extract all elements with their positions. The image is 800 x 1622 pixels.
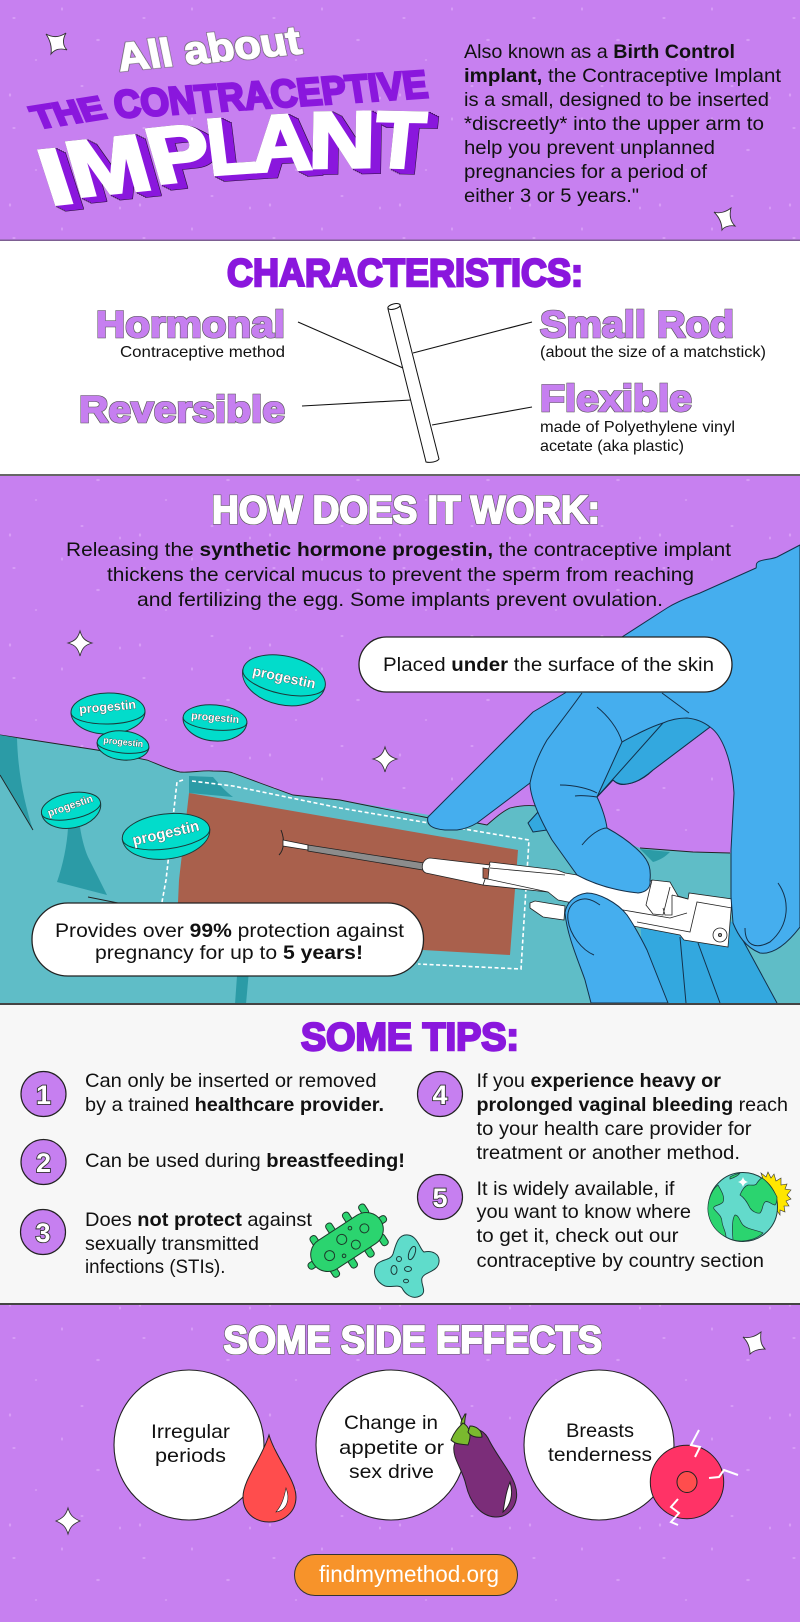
skin — [0, 735, 800, 1004]
callout: under the skin — [359, 637, 732, 692]
side effect: appetite or sex drive: Change in — [344, 1412, 438, 1434]
title: implant: A — [248, 97, 314, 189]
heading: characteristics: CHARACTERISTICS: — [227, 252, 583, 295]
explanation text — [66, 539, 732, 611]
title: the contraceptive — [25, 64, 431, 136]
intro text: Also known as a Birth Control — [464, 41, 735, 63]
intro text: implant, the Contraceptive Implant — [464, 65, 782, 87]
pill — [237, 648, 330, 713]
intro text: *discreetly* into the upper arm to — [464, 113, 764, 135]
label: flexible — [540, 378, 735, 455]
tip 5: It is widely available, if — [476, 1178, 675, 1200]
intro text: pregnancies for a period of — [464, 161, 708, 183]
intro text: help you prevent unplanned — [464, 137, 715, 159]
tip 3: infections (STIs). — [85, 1256, 226, 1278]
label: small rod: (about the size of a matchstick) — [540, 344, 766, 361]
pill: progestin — [131, 818, 201, 849]
title: implant: N — [308, 95, 376, 185]
icon: breast — [650, 1430, 738, 1525]
tip 2 — [21, 1140, 405, 1184]
tip 3 — [20, 1209, 313, 1278]
pill: progestin — [251, 663, 317, 692]
title: implant: I — [28, 133, 83, 222]
pill: progestin — [191, 710, 240, 726]
tip 5: 5 — [432, 1183, 448, 1213]
side effect: irregular periods: Irregular — [151, 1421, 231, 1443]
pill — [120, 809, 213, 864]
diagram: implant rod — [387, 302, 439, 462]
tip 4: prolonged vaginal bleeding reach — [476, 1094, 788, 1116]
callout: 99% protection: pregnancy for up to 5 years! — [95, 942, 363, 964]
dark lower fingers — [640, 915, 777, 1004]
side effect: breast tenderness — [524, 1370, 738, 1525]
icon: eggplant — [451, 1414, 517, 1517]
title: implant — [28, 94, 430, 222]
icon: globe with sun — [708, 1172, 791, 1242]
tip 1: by a trained healthcare provider. — [85, 1094, 384, 1116]
pill: progestin — [46, 793, 95, 819]
label: small rod: Small Rod — [540, 304, 734, 345]
label: hormonal — [96, 304, 285, 361]
panel: how does it work — [0, 476, 800, 1004]
tip 5 — [418, 1174, 764, 1272]
icon: sparkle top right — [714, 208, 735, 230]
intro text: either 3 or 5 years." — [464, 185, 639, 207]
icon: sparkle — [743, 1332, 765, 1354]
side effect: breast tenderness: tenderness — [548, 1444, 652, 1466]
icon: sparkle top left — [46, 33, 67, 54]
tip 2: Can be used during breastfeeding! — [85, 1150, 405, 1172]
panel: characteristics — [0, 241, 800, 476]
label: flexible: made of Polyethylene vinyl — [540, 419, 735, 436]
tip 4: treatment or another method. — [476, 1142, 740, 1164]
tip 2: 2 — [36, 1148, 51, 1178]
title: the contraceptive: THE — [25, 91, 111, 136]
intro text: is a small, designed to be inserted — [464, 89, 769, 111]
panel: header — [0, 0, 800, 242]
side effect: breast tenderness: Breasts — [566, 1420, 634, 1442]
heading: some side effects: SOME SIDE EFFECTS — [224, 1319, 602, 1362]
tip 1: 1 — [36, 1080, 51, 1110]
tip 4: If you experience heavy or — [476, 1070, 721, 1092]
skin shading — [0, 735, 670, 1004]
label: reversible: Reversible — [79, 389, 285, 430]
pill — [39, 788, 104, 833]
dashed sterile outline — [162, 780, 529, 969]
tip 4 — [418, 1070, 788, 1164]
pill: progestin — [79, 698, 137, 716]
side effect: appetite or sex drive: appetite or — [339, 1437, 445, 1459]
brown incision patch — [177, 793, 518, 955]
connector lines — [298, 322, 532, 425]
panel: some side effects — [0, 1305, 800, 1622]
callout: 99% protection: Provides over 99% protection against — [55, 920, 405, 942]
label: hormonal: Hormonal — [96, 304, 285, 345]
label: small rod — [540, 304, 766, 361]
icon: blood drop — [243, 1435, 296, 1522]
title: implant: P — [136, 108, 223, 201]
icon: green bacterium — [294, 1195, 400, 1289]
pill — [96, 728, 150, 763]
title: implant: T — [370, 94, 430, 185]
tip 3: Does not protect against — [85, 1209, 313, 1231]
callout: under the skin: Placed under the surface of the skin — [383, 654, 714, 676]
side effect: irregular periods: periods — [155, 1445, 226, 1467]
skin outline — [0, 735, 730, 853]
title: implant: L — [201, 100, 260, 192]
tip 4: to your health care provider for — [476, 1118, 752, 1140]
title: all about: All about — [113, 19, 305, 80]
title: the contraceptive: CONTRACEPTIVE — [111, 64, 431, 127]
progestin pills — [39, 648, 330, 864]
icon: sparkle — [373, 747, 397, 772]
tip 1 — [21, 1070, 384, 1116]
callout: 99% protection — [32, 903, 424, 976]
pill — [71, 692, 145, 735]
button: findmymethod.org: findmymethod.org — [319, 1561, 499, 1587]
explanation text: thickens the cervical mucus to prevent the sperm from reaching — [107, 564, 694, 586]
tip 3: sexually transmitted — [85, 1233, 259, 1255]
tip 4: 4 — [432, 1080, 448, 1110]
label: hormonal: Contraceptive method — [120, 344, 285, 361]
intro text — [464, 41, 782, 207]
side effect: irregular periods — [114, 1370, 296, 1522]
pill — [181, 702, 248, 744]
explanation text: Releasing the synthetic hormone progestin, the contraceptive implant — [66, 539, 732, 561]
tip 3: 3 — [35, 1218, 51, 1248]
title: implant: M — [56, 119, 161, 214]
icon: teal amoeba — [375, 1235, 439, 1297]
side effect: appetite or sex drive — [316, 1370, 517, 1520]
icon: sparkle — [56, 1508, 80, 1534]
panel: some tips — [0, 1003, 800, 1305]
gloved hand — [428, 545, 800, 1003]
pill: progestin — [103, 735, 144, 749]
tip 5: contraceptive by country section — [476, 1250, 764, 1272]
label: flexible: acetate (aka plastic) — [540, 438, 684, 455]
side effect: appetite or sex drive: sex drive — [349, 1461, 434, 1483]
tip 1: Can only be inserted or removed — [85, 1070, 376, 1092]
tip 5: you want to know where — [476, 1201, 691, 1223]
heading: some tips: SOME TIPS: — [301, 1016, 519, 1059]
heading: how does it work: HOW DOES IT WORK: — [212, 489, 600, 532]
label: flexible: Flexible — [540, 378, 692, 419]
implant applicator — [283, 840, 732, 947]
tip 5: to get it, check out our — [476, 1225, 679, 1247]
icon: sparkle — [68, 631, 92, 656]
button: findmymethod.org — [294, 1554, 518, 1596]
explanation text: and fertilizing the egg. Some implants prevent ovulation. — [137, 589, 663, 611]
